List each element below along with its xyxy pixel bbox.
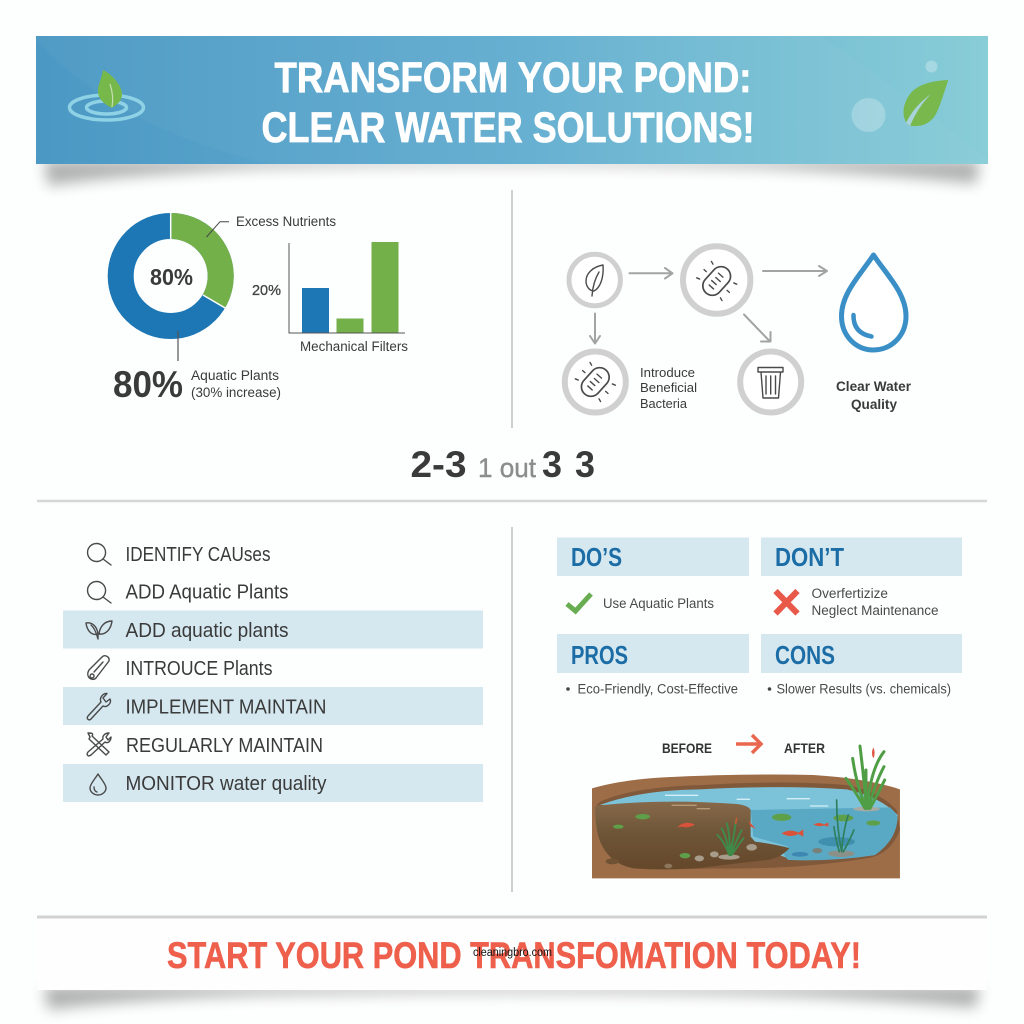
pond bank — [592, 775, 900, 878]
fish — [677, 821, 828, 837]
label: introduce beneficial bacteria: Introduce — [640, 365, 695, 380]
watermark: cleaningbro.com — [473, 947, 552, 959]
step: monitor water quality: MONITOR water quality — [126, 773, 326, 795]
do's — [557, 538, 749, 611]
cons: Slower Results (vs. chemicals) — [776, 682, 951, 696]
call to action banner: START YOUR POND TRANSFOMATION TODAY! — [167, 935, 861, 976]
bar chart: 20% — [252, 283, 281, 299]
step: introduce plants — [88, 656, 272, 680]
don't: Overfertizize — [812, 586, 888, 601]
label: aquatic plants: 80% — [113, 364, 183, 405]
pros: Eco-Friendly, Cost-Effective — [578, 682, 738, 696]
do's: DO’S — [571, 542, 622, 572]
statistic line: 1 out — [478, 453, 536, 483]
arrows — [590, 266, 827, 344]
donut chart — [121, 212, 234, 326]
step: introduce plants: INTROUCE Plants — [126, 658, 272, 680]
water highlights — [665, 795, 828, 806]
before and after labels: AFTER — [784, 740, 825, 756]
pros — [557, 634, 749, 696]
pond illustration — [592, 746, 900, 878]
label: aquatic plants: (30% increase) — [191, 385, 281, 400]
do's: Use Aquatic Plants — [603, 596, 714, 611]
stones — [606, 807, 880, 868]
label: excess nutrients — [206, 214, 336, 237]
label: clear water quality — [836, 378, 912, 412]
cons — [761, 634, 962, 696]
donut chart: 80% — [150, 264, 193, 290]
before and after labels — [662, 735, 825, 756]
header banner — [36, 36, 988, 186]
cons: CONS — [775, 640, 835, 670]
don't — [761, 538, 962, 618]
step: add aquatic plants highlighted: ADD aquatic plants — [126, 620, 288, 642]
step: implement maintain: IMPLEMENT MAINTAIN — [126, 696, 326, 718]
icon: leaf circle — [569, 254, 620, 306]
label: aquatic plants — [113, 331, 281, 405]
clear water — [600, 787, 898, 859]
step: implement maintain — [87, 693, 326, 720]
don't: Neglect Maintenance — [812, 603, 938, 618]
step: add aquatic plants: ADD Aquatic Plants — [126, 582, 288, 604]
label: aquatic plants: Aquatic Plants — [191, 368, 279, 383]
panel: action steps — [63, 543, 483, 802]
bar chart — [252, 242, 408, 354]
icon: bacteria circle lower — [565, 352, 626, 412]
panel: cause statistics — [113, 212, 408, 405]
icon: leaf and bubbles — [852, 60, 948, 132]
murky water — [595, 802, 789, 869]
statistic line: 3 — [575, 444, 595, 485]
label: clear water quality: Clear Water — [836, 378, 912, 394]
lily pads — [613, 814, 880, 858]
statistic line: 2-3 — [410, 444, 466, 485]
call to action banner — [37, 917, 987, 1010]
statistic line — [410, 444, 595, 485]
title: CLEAR WATER SOLUTIONS! — [262, 104, 754, 152]
bar chart: Mechanical Filters — [300, 339, 408, 354]
icon: water drop — [842, 255, 906, 350]
icon: bacteria circle — [683, 246, 750, 314]
before and after labels: BEFORE — [662, 740, 712, 756]
icon: waste bin circle — [740, 352, 801, 412]
label: introduce beneficial bacteria: Beneficial — [640, 380, 697, 395]
label: introduce beneficial bacteria: Bacteria — [640, 396, 688, 411]
pros: PROS — [571, 640, 628, 670]
step: identify causes — [88, 543, 271, 566]
title — [262, 54, 754, 152]
label: introduce beneficial bacteria — [640, 365, 697, 411]
step: identify causes: IDENTIFY CAUses — [126, 544, 270, 566]
title: TRANSFORM YOUR POND: — [274, 54, 752, 102]
don't: DON’T — [775, 542, 844, 572]
icon: leaf on water ripple — [70, 70, 144, 120]
step: regularly maintain: REGULARLY MAINTAIN — [126, 735, 323, 757]
plants — [717, 746, 885, 855]
panel: process flow — [565, 246, 912, 412]
panel: do's and don'ts — [557, 538, 962, 696]
statistic line: 3 — [542, 444, 562, 485]
label: excess nutrients: Excess Nutrients — [236, 214, 336, 229]
label: clear water quality: Quality — [851, 396, 897, 412]
